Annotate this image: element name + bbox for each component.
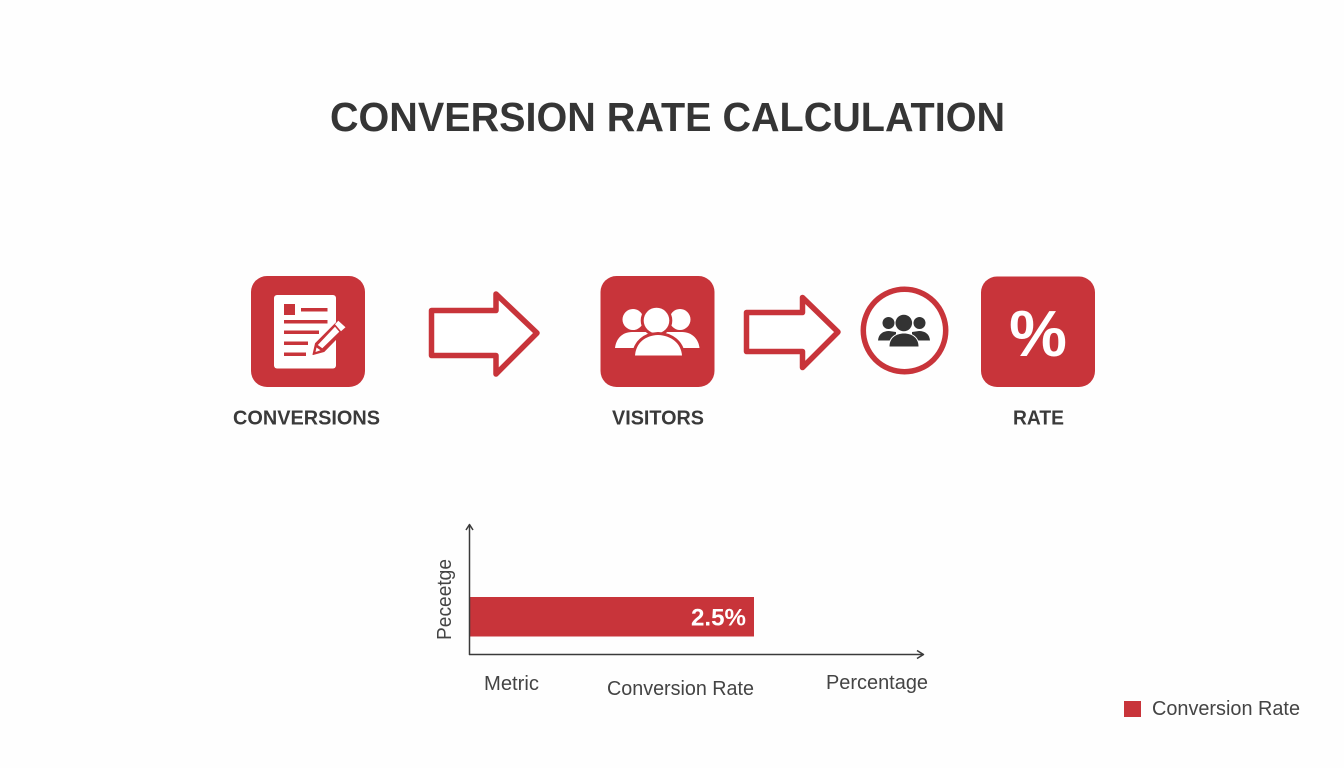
icon: circled group of people (863, 289, 946, 372)
icon: percent (981, 276, 1095, 387)
axis label: metric: Metric (484, 673, 539, 695)
axis label: percentage: Percentage (826, 672, 928, 694)
step: conversions (233, 276, 380, 430)
x axis (469, 650, 924, 658)
icon: percent: % (1009, 297, 1067, 370)
y-axis title: Peceetge (434, 559, 456, 640)
title: CONVERSION RATE CALCULATION (330, 94, 1005, 140)
bar: conversion rate (470, 597, 754, 636)
arrow: visitors to rate (746, 298, 838, 368)
axis label: conversion rate: Conversion Rate (607, 678, 754, 700)
label: visitors: VISITORS (612, 408, 704, 430)
bar value: 2.5% (691, 604, 746, 632)
y axis (466, 524, 473, 655)
step: rate (981, 276, 1095, 430)
legend swatch (1124, 701, 1141, 717)
label: rate: RATE (1013, 408, 1064, 430)
arrow: conversions to visitors (432, 294, 537, 374)
step: visitors (600, 276, 714, 430)
icon: group of people (600, 276, 714, 387)
bar chart (434, 524, 928, 700)
label: conversions: CONVERSIONS (233, 408, 380, 430)
legend (1124, 698, 1300, 720)
icon: document with pencil (251, 276, 365, 387)
legend text: Conversion Rate (1152, 698, 1300, 720)
